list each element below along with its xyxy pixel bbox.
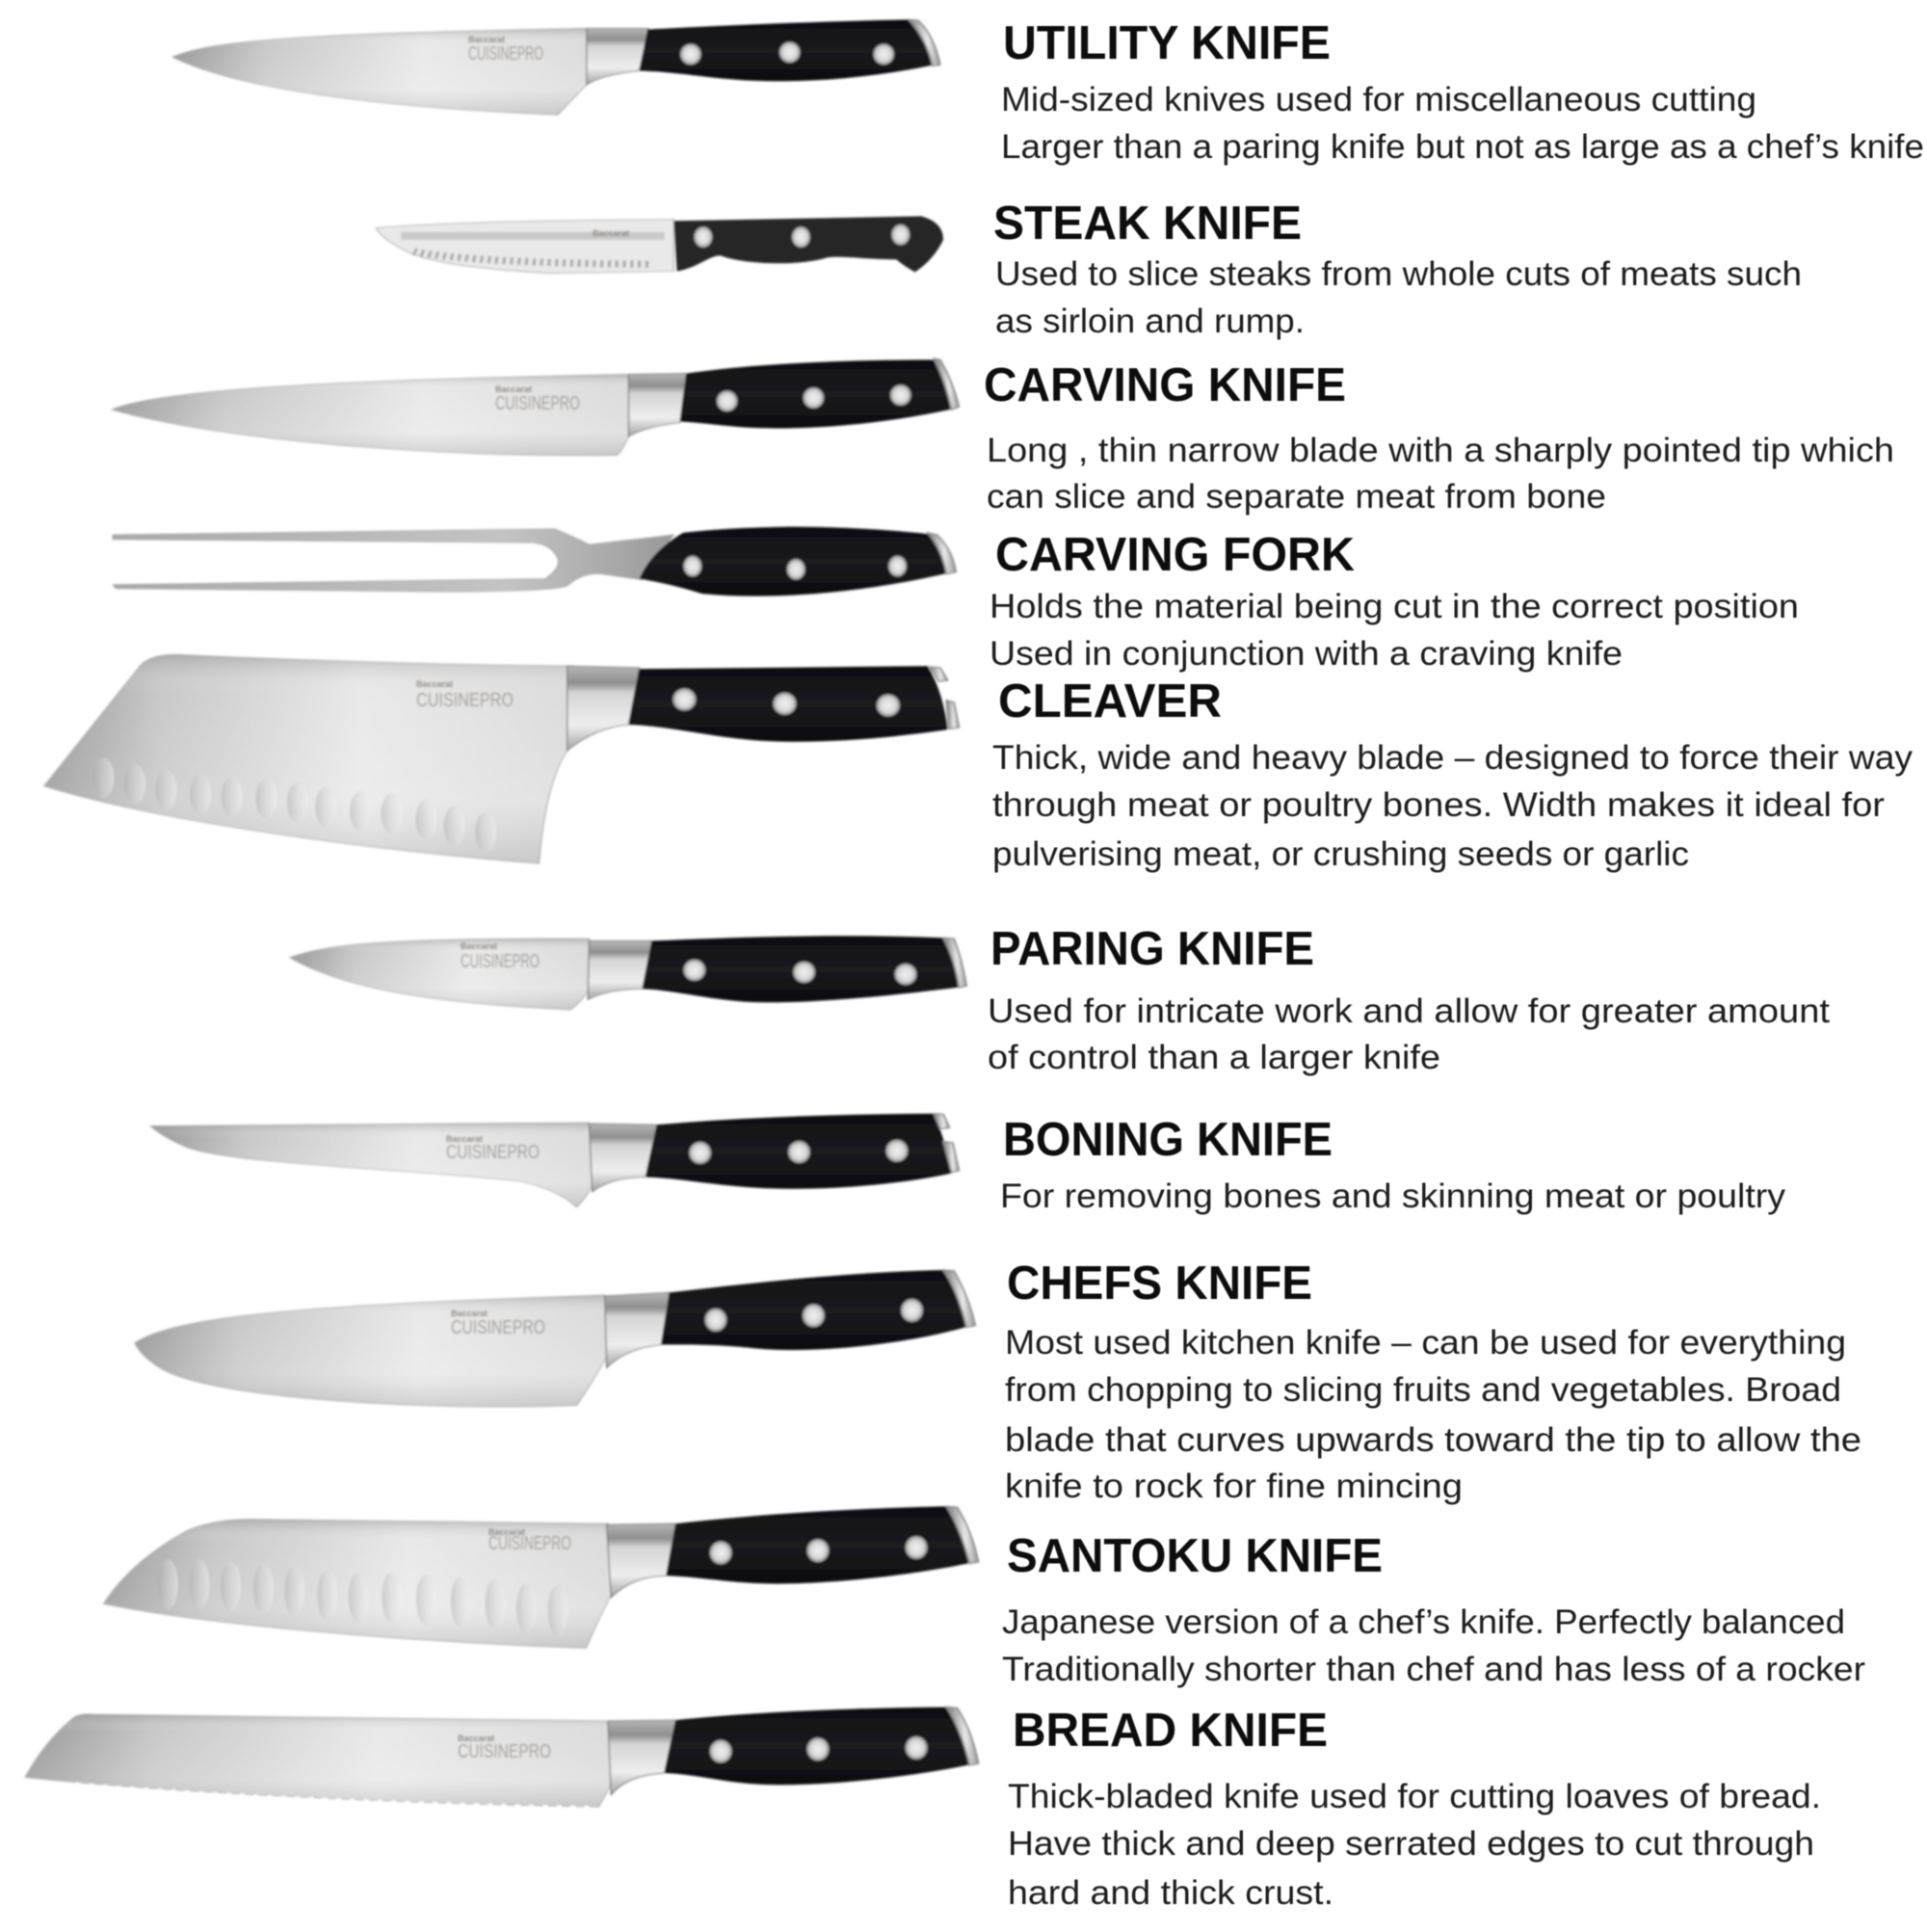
knife: santoku: Baccarat	[488, 1527, 525, 1537]
knife: paring	[290, 936, 966, 1010]
heading: carving fork: CARVING FORK	[995, 529, 1355, 581]
heading: carving knife: CARVING KNIFE	[984, 359, 1346, 411]
description: carving fork: Holds the material being cut in the correct position	[990, 588, 1799, 625]
description: paring knife: Used for intricate work and allow for greater amount	[988, 992, 1830, 1030]
knife: carving: Baccarat	[495, 384, 532, 394]
description: paring knife	[988, 992, 1830, 1076]
knife: carving	[112, 358, 959, 456]
description: chefs knife: knife to rock for fine mincing	[1005, 1468, 1463, 1505]
description: cleaver: through meat or poultry bones. Width makes it ideal for	[992, 786, 1885, 824]
knife: boning: Baccarat	[446, 1134, 483, 1144]
knife: bread: Baccarat	[458, 1734, 494, 1743]
description: steak knife	[995, 255, 1802, 340]
description: utility knife: Mid-sized knives used for miscellaneous cutting	[1001, 81, 1756, 119]
description: boning knife: For removing bones and skinning meat or poultry	[1000, 1178, 1786, 1215]
knife: steak	[376, 216, 943, 274]
knife descriptions text column	[984, 17, 1924, 1912]
description: bread knife: hard and thick crust.	[1008, 1874, 1333, 1912]
knife: paring: CUISINEPRO	[461, 951, 540, 972]
knife: bread: CUISINEPRO	[458, 1741, 551, 1762]
description: carving fork	[990, 588, 1799, 673]
heading: cleaver: CLEAVER	[998, 675, 1222, 728]
heading: boning knife: BONING KNIFE	[1003, 1114, 1333, 1166]
heading: paring knife: PARING KNIFE	[990, 923, 1314, 975]
knife: chefs	[135, 1270, 975, 1407]
knife: cleaver	[44, 654, 959, 863]
description: carving knife: Long , thin narrow blade with a sharply pointed tip which	[987, 432, 1894, 469]
description: steak knife: as sirloin and rump.	[995, 303, 1305, 340]
heading: chefs knife: CHEFS KNIFE	[1007, 1257, 1312, 1310]
description: santoku knife	[1002, 1603, 1865, 1688]
description: steak knife: Used to slice steaks from whole cuts of meats such	[995, 255, 1802, 293]
description: cleaver: pulverising meat, or crushing seeds or garlic	[992, 835, 1689, 873]
description: chefs knife: Most used kitchen knife – can be used for everything	[1005, 1324, 1846, 1362]
heading: santoku knife: SANTOKU KNIFE	[1007, 1530, 1383, 1582]
description: carving knife	[987, 432, 1894, 516]
description: bread knife: Have thick and deep serrated edges to cut through	[1008, 1825, 1814, 1863]
description: paring knife: of control than a larger knife	[988, 1039, 1440, 1076]
carving fork	[113, 527, 956, 596]
heading: utility knife: UTILITY KNIFE	[1003, 17, 1331, 69]
description: utility knife	[1001, 81, 1924, 166]
knife: chefs: CUISINEPRO	[451, 1317, 545, 1338]
knife: bread	[25, 1707, 978, 1808]
description: chefs knife: blade that curves upwards toward the tip to allow the	[1005, 1421, 1861, 1459]
description: chefs knife: from chopping to slicing fruits and vegetables. Broad	[1005, 1371, 1841, 1409]
description: cleaver	[992, 739, 1914, 873]
heading: steak knife: STEAK KNIFE	[993, 198, 1302, 250]
description: bread knife	[1008, 1778, 1821, 1912]
knife: utility: CUISINEPRO	[468, 43, 543, 65]
heading: bread knife: BREAD KNIFE	[1013, 1705, 1328, 1757]
description: santoku knife: Traditionally shorter than chef and has less of a rocker	[1002, 1651, 1865, 1688]
knife: boning: CUISINEPRO	[446, 1142, 540, 1163]
knife: paring: Baccarat	[461, 941, 497, 951]
knife: cleaver: CUISINEPRO	[416, 690, 514, 711]
description: carving knife: can slice and separate meat from bone	[987, 478, 1606, 516]
knife: steak: Baccarat	[593, 228, 629, 238]
description: santoku knife: Japanese version of a chef’s knife. Perfectly balanced	[1002, 1603, 1845, 1641]
description: cleaver: Thick, wide and heavy blade – designed to force their way	[992, 739, 1914, 777]
knife: santoku: CUISINEPRO	[488, 1533, 571, 1554]
knife: chefs: Baccarat	[451, 1309, 488, 1318]
description: utility knife: Larger than a paring knife but not as large as a chef’s knife	[1001, 128, 1924, 166]
description: bread knife: Thick-bladed knife used for cutting loaves of bread.	[1008, 1778, 1821, 1815]
knife: utility	[172, 19, 940, 115]
knife: carving: CUISINEPRO	[495, 393, 580, 414]
knife illustrations	[25, 19, 978, 1808]
knife: santoku	[103, 1506, 978, 1648]
description: chefs knife	[1005, 1324, 1861, 1505]
knife: boning	[150, 1114, 959, 1207]
knife: utility: Baccarat	[468, 35, 505, 44]
description: carving fork: Used in conjunction with a craving knife	[990, 635, 1623, 673]
knife: cleaver: Baccarat	[416, 679, 453, 689]
